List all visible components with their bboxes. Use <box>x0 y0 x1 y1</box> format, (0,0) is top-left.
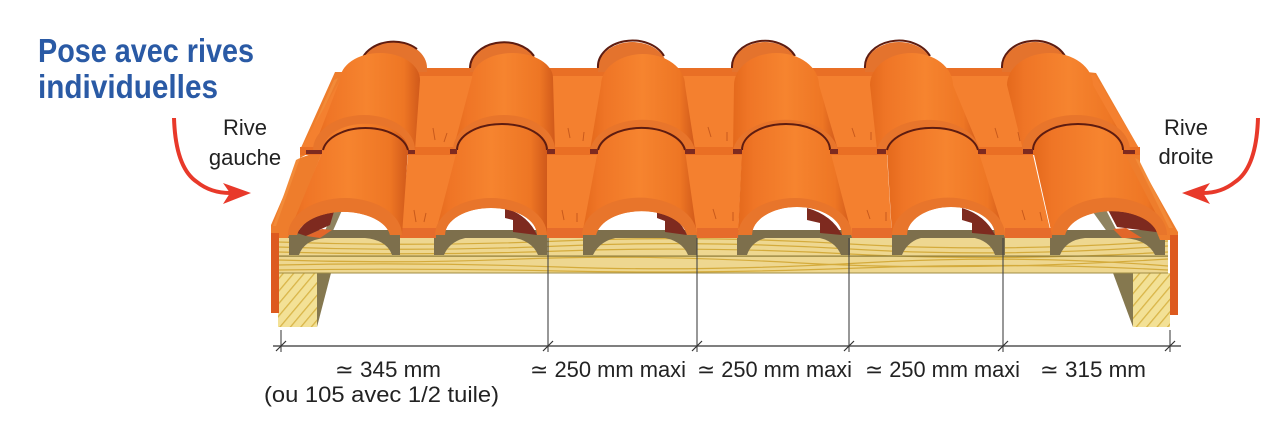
tile front 5 <box>887 128 1005 235</box>
dimension labels: ≃ 250 mm maxi <box>697 357 852 382</box>
label: rive droite <box>1158 115 1214 169</box>
tile back 1 <box>313 42 427 150</box>
label: rive gauche <box>209 115 281 170</box>
dimension labels: ≃ 345 mm <box>335 357 441 382</box>
timber structure <box>278 208 1170 327</box>
label: rive droite: droite <box>1158 144 1214 169</box>
verge tiles: left <box>271 72 350 313</box>
rafter: front right <box>1113 273 1170 327</box>
interior shadows under tiles <box>297 208 1163 238</box>
verge tiles: right <box>1087 72 1178 315</box>
back row round tiles <box>313 41 1130 150</box>
tile front 2 <box>435 124 547 235</box>
tile front 6 <box>1033 124 1167 235</box>
tile back 2 <box>453 42 555 150</box>
dimension labels: (ou 105 avec 1/2 tuile) <box>264 382 499 407</box>
rafter: front left <box>278 273 331 327</box>
title: individuelles <box>38 68 218 105</box>
back row flat tiles <box>300 68 1140 155</box>
title <box>38 32 254 105</box>
tile back 6 <box>1002 41 1130 150</box>
rafter: back right <box>1090 208 1118 233</box>
tile back 4 <box>732 41 838 150</box>
dimension labels: ≃ 250 mm maxi <box>530 357 686 382</box>
dimension labels: ≃ 315 mm <box>1040 357 1146 382</box>
front row round tiles <box>288 124 1167 235</box>
wooden batten plank <box>278 238 1168 274</box>
tile joint notches <box>306 149 1135 154</box>
dimension labels <box>264 357 1146 407</box>
arrow: rive droite <box>1182 118 1258 204</box>
dimension labels: ≃ 250 mm maxi <box>865 357 1020 382</box>
rafter: back left <box>324 208 343 233</box>
label: rive droite: Rive <box>1164 115 1208 140</box>
front row flat tiles <box>400 155 1052 238</box>
tile front 1 <box>288 124 408 235</box>
tile back 5 <box>865 41 980 150</box>
dimension lines <box>273 238 1181 352</box>
arrow: rive gauche <box>174 118 251 204</box>
label: rive gauche: Rive <box>223 115 267 140</box>
tile supports <box>289 237 1165 255</box>
tile back 3 <box>590 41 695 150</box>
tile front 3 <box>582 128 697 235</box>
label: rive gauche: gauche <box>209 145 281 170</box>
batten <box>288 230 1163 238</box>
tile front 4 <box>738 124 852 235</box>
title: Pose avec rives <box>38 32 254 69</box>
